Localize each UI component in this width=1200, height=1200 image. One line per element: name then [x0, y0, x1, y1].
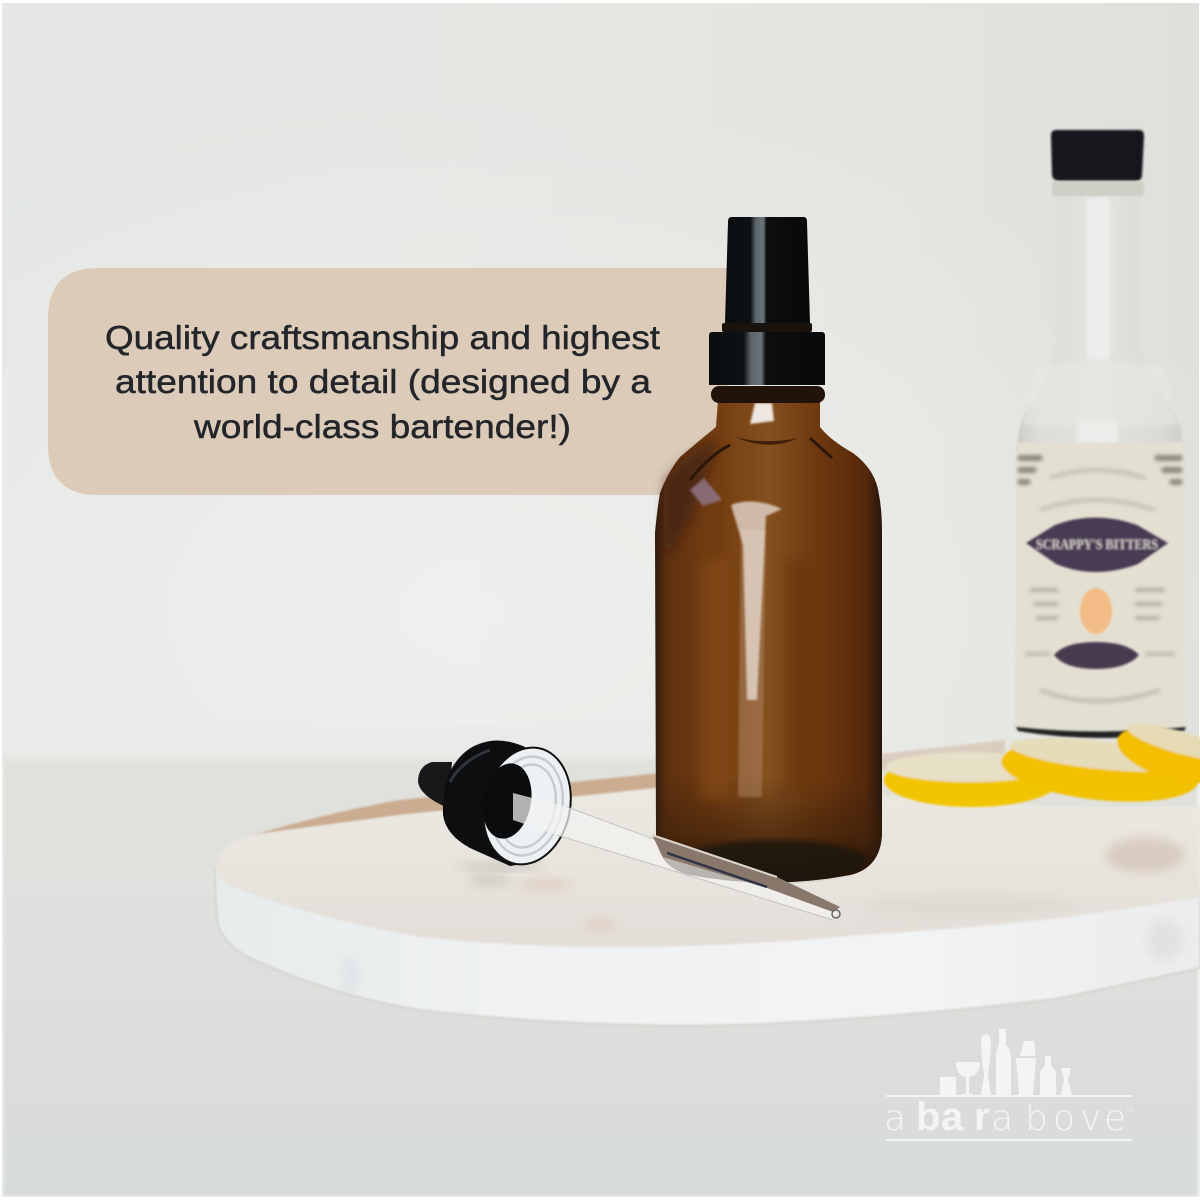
collar	[709, 332, 825, 385]
label ornaments	[1018, 458, 1182, 701]
logo cocktail shaker	[1016, 1041, 1036, 1095]
label lower panel	[1054, 642, 1139, 669]
soft side tones	[664, 440, 812, 800]
bottle glass	[1017, 188, 1183, 450]
collar step	[722, 323, 812, 332]
logo shelf line	[886, 1095, 1132, 1097]
logo wordmark: a	[884, 1098, 906, 1139]
shoulder reflections	[690, 478, 722, 506]
callout text: world-class bartender!)	[193, 408, 571, 445]
dark base	[683, 840, 867, 880]
wall background	[2, 3, 1199, 763]
neck ring	[711, 386, 825, 403]
edge shading	[342, 920, 1183, 995]
callout background	[48, 268, 727, 495]
cap ring	[1052, 181, 1144, 196]
back bitters bottle	[1015, 130, 1186, 738]
logo jigger	[1061, 1068, 1072, 1095]
lemon slice left	[884, 752, 1060, 807]
cap threads	[482, 750, 572, 862]
logo lower line	[886, 1139, 1132, 1141]
marble veining	[468, 837, 1185, 929]
bottle base	[1016, 727, 1186, 738]
logo wordmark: bar	[916, 1095, 990, 1139]
amber bottle	[655, 217, 882, 882]
black cap	[1051, 130, 1144, 181]
lemon slices	[884, 715, 1200, 810]
logo wordmark: above	[991, 1098, 1126, 1139]
glass highlight	[1078, 198, 1118, 442]
bottle body	[655, 400, 882, 882]
board top surface	[215, 788, 1200, 947]
label title panel	[1026, 518, 1168, 572]
cap opening	[473, 739, 581, 873]
marble board	[215, 788, 1200, 1025]
glass pipette	[513, 793, 840, 920]
label title panel: SCRAPPY'S BITTERS	[1036, 537, 1158, 553]
cap interior	[477, 759, 537, 843]
logo coupe glass	[956, 1062, 980, 1095]
rubber bulb	[418, 762, 452, 808]
board side edge	[215, 868, 1200, 1025]
dropper shadow	[455, 861, 545, 871]
brand logo	[884, 1029, 1133, 1141]
callout text: attention to detail (designed by a	[115, 363, 652, 400]
logo small bottle	[1040, 1056, 1056, 1095]
upper spray cap	[725, 217, 810, 323]
paper label	[1015, 442, 1186, 732]
logo wordmark: TM	[1126, 1108, 1133, 1114]
cap gloss	[450, 750, 490, 782]
wooden board behind marble	[250, 740, 1005, 836]
logo bottle	[996, 1029, 1011, 1095]
bottom shading	[655, 400, 882, 882]
black cap shell	[443, 740, 535, 866]
label orange oval	[1080, 588, 1112, 634]
lemon slice middle	[998, 731, 1200, 810]
central vertical highlight	[738, 530, 766, 797]
logo bar spoon	[981, 1034, 991, 1095]
dropper	[418, 739, 840, 920]
callout text: Quality craftsmanship and highest	[105, 319, 660, 356]
logo rocks glass	[940, 1077, 956, 1095]
lemon slice right	[1111, 715, 1200, 794]
glass shoulder tone	[1022, 362, 1178, 425]
